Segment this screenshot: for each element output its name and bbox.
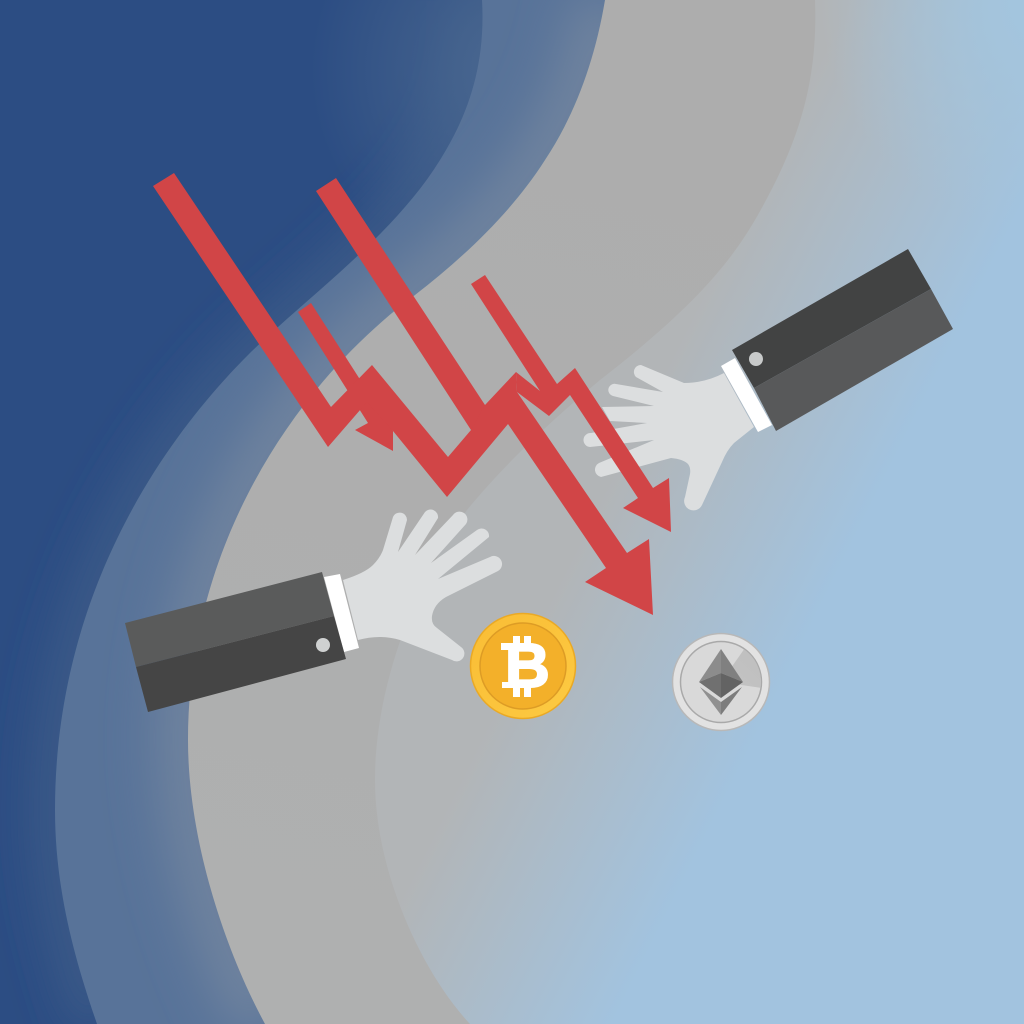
- bitcoin symbol: B: [505, 632, 550, 701]
- mid blue band: [55, 0, 605, 1024]
- top right glow: [800, 0, 1024, 240]
- left arm reaching: [125, 510, 502, 712]
- right small arrow with zigzag: [471, 275, 671, 532]
- right sleeve: [732, 249, 953, 431]
- left hand: [343, 510, 502, 661]
- right shirt cuff: [721, 358, 772, 432]
- bitcoin coin: [470, 614, 576, 718]
- right arm reaching: [583, 249, 953, 510]
- ethereum diamond: [699, 649, 743, 715]
- pale blue wave: [375, 0, 1024, 1024]
- right sleeve button: [749, 352, 763, 366]
- left sleeve button: [316, 638, 330, 652]
- right hand: [583, 365, 754, 510]
- ethereum coin: [672, 634, 775, 730]
- left sleeve: [125, 572, 346, 712]
- long tall arrow: [316, 178, 500, 430]
- small left arrow: [298, 303, 393, 451]
- falling red arrows: [153, 173, 671, 615]
- main zigzag arrow: [153, 173, 653, 615]
- left shirt cuff: [324, 574, 359, 652]
